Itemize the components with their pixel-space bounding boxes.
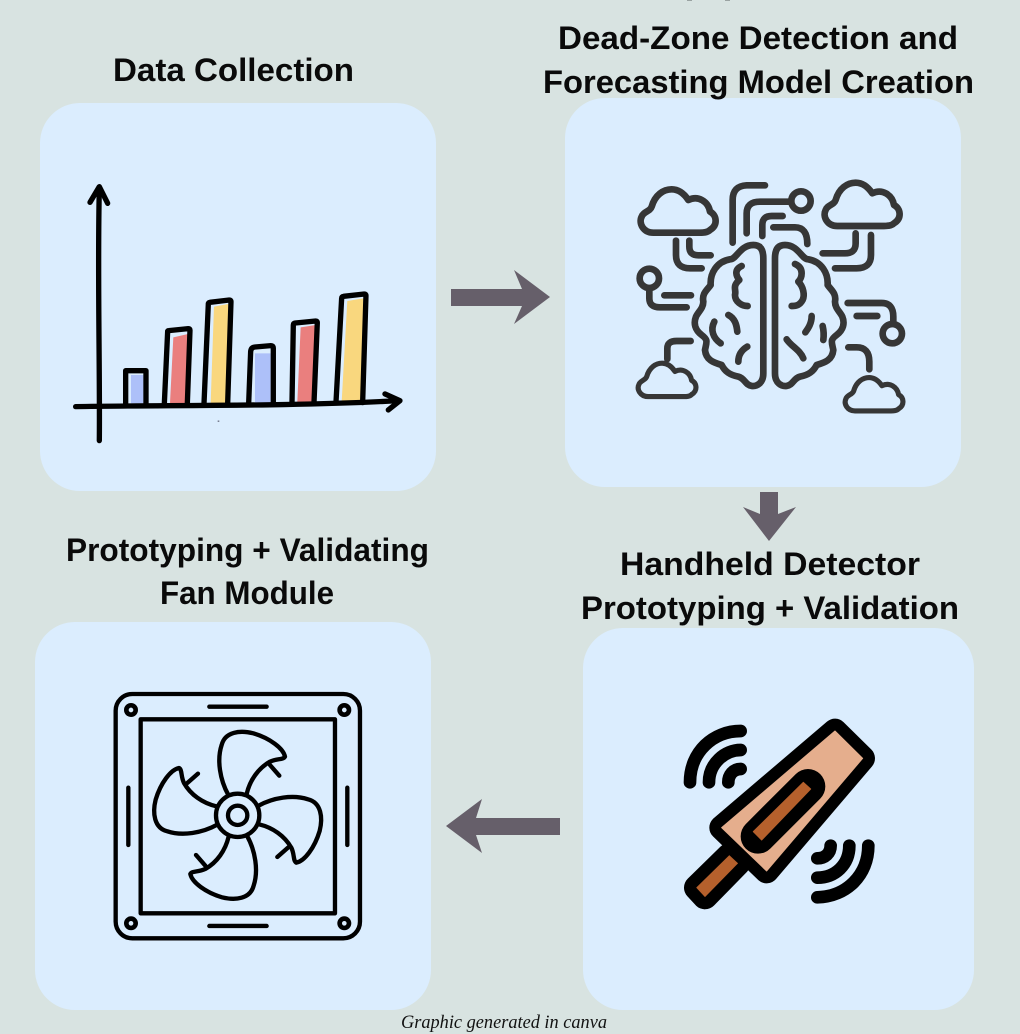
arrow: right (451, 270, 550, 324)
heading: model creation: Dead-Zone Detection and (558, 20, 958, 56)
heading: handheld detector: Prototyping + Validation (581, 590, 959, 626)
heading: model creation (543, 20, 974, 100)
arrow: down (743, 492, 796, 541)
icon: handheld detector (690, 731, 868, 897)
heading: fan module: Fan Module (160, 575, 334, 611)
bar chart (76, 187, 400, 441)
arrow: left (446, 799, 560, 853)
icon: fan (116, 694, 360, 938)
panel: handheld detector (583, 628, 974, 1010)
panel: data collection (40, 103, 436, 491)
heading: fan module: Prototyping + Validating (66, 532, 429, 568)
caption: Graphic generated in canva (401, 1013, 607, 1033)
heading: data collection: Data Collection (113, 52, 354, 88)
panel: fan module (35, 622, 431, 1010)
heading: handheld detector: Handheld Detector (620, 546, 920, 582)
heading: handheld detector (581, 546, 959, 626)
panel: model creation (565, 98, 961, 487)
heading: model creation: Forecasting Model Creation (543, 64, 974, 100)
icon: brain with clouds and circuits (638, 183, 903, 411)
heading: fan module (66, 532, 429, 611)
